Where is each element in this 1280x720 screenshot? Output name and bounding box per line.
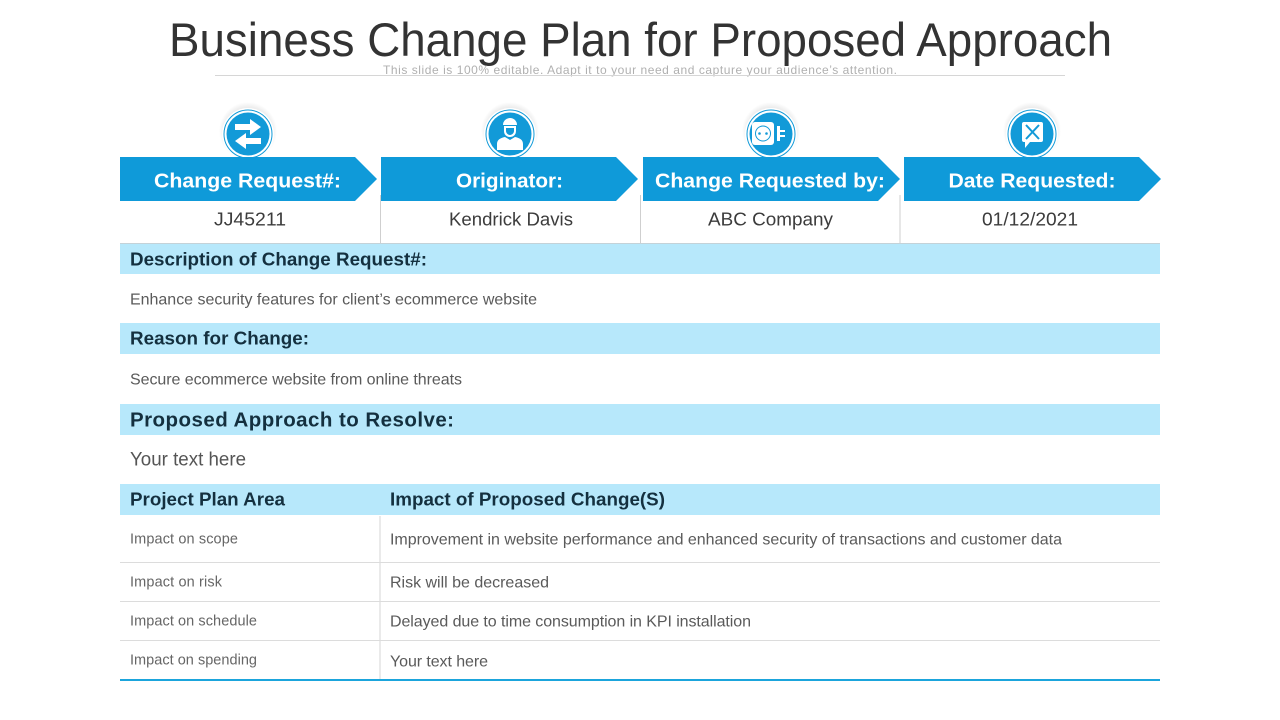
row: scope: Impact on scope xyxy=(130,532,238,548)
section: description of change request xyxy=(120,244,1160,308)
row: schedule: Delayed due to time consumption in KPI installation xyxy=(390,614,751,630)
section: reason for change: Secure ecommerce website from online threats xyxy=(130,372,462,388)
subtitle: This slide is 100% editable. Adapt it to your need and capture your audience’s attention. xyxy=(383,63,897,77)
value: originator: Kendrick Davis xyxy=(449,208,573,230)
row: risk xyxy=(130,574,549,592)
column: change request xyxy=(120,102,377,230)
table header: Impact of Proposed Change(S) xyxy=(390,490,665,510)
banner: change requested by: Change Requested by: xyxy=(655,170,885,192)
banner: originator: Originator: xyxy=(456,170,563,192)
icon: worker xyxy=(481,102,539,160)
banner: change request: Change Request#: xyxy=(154,170,341,192)
value: change requested by: ABC Company xyxy=(708,208,834,230)
section: proposed approach xyxy=(120,404,1160,470)
column: date requested xyxy=(904,102,1161,230)
icon: tools speech bubble xyxy=(1003,102,1061,160)
row: scope: Improvement in website performance and enhanced security of transactions and customer data xyxy=(390,532,1062,548)
section: proposed approach: Proposed Approach to Resolve: xyxy=(130,408,454,432)
row: spending: Impact on spending xyxy=(130,652,257,668)
row: risk: Impact on risk xyxy=(130,574,223,590)
banner: change request xyxy=(120,157,377,201)
section: reason for change xyxy=(120,323,1160,388)
row: schedule xyxy=(130,614,751,630)
section: description of change request: Enhance security features for client’s ecommerce website xyxy=(130,292,537,308)
banner: date requested xyxy=(904,157,1161,201)
section: reason for change: Reason for Change: xyxy=(130,328,309,348)
column: change requested by xyxy=(643,102,900,230)
banner: change requested by xyxy=(643,157,900,201)
value: change request: JJ45211 xyxy=(214,208,286,230)
section: description of change request: Description of Change Request#: xyxy=(130,250,427,270)
row: schedule: Impact on schedule xyxy=(130,614,257,630)
table header: Project Plan Area xyxy=(130,490,286,510)
section: proposed approach: Your text here xyxy=(130,450,246,470)
table header xyxy=(120,484,1160,515)
column: originator xyxy=(381,102,638,230)
row: spending: Your text here xyxy=(390,654,488,670)
impact table xyxy=(120,484,1160,680)
icon: power socket xyxy=(742,102,800,160)
banner: originator xyxy=(381,157,638,201)
icon: swap arrows xyxy=(219,102,277,160)
banner: date requested: Date Requested: xyxy=(948,170,1116,192)
row: spending xyxy=(130,652,488,670)
row: risk: Risk will be decreased xyxy=(390,574,549,592)
title: Business Change Plan for Proposed Approach xyxy=(169,13,1112,66)
value: date requested: 01/12/2021 xyxy=(982,208,1078,230)
